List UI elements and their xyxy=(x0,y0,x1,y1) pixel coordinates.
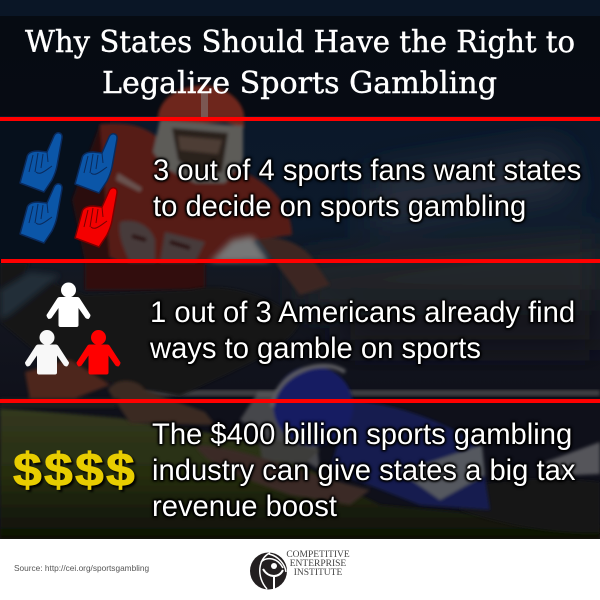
logo wordmark xyxy=(286,550,350,578)
title: Legalize Sports Gambling xyxy=(102,66,497,101)
title: Why States Should Have the Right to xyxy=(25,25,575,60)
sky haze xyxy=(300,145,600,350)
icon: red foam finger xyxy=(75,188,117,247)
logo wordmark: ENTERPRISE xyxy=(290,559,346,569)
icon: blue foam finger xyxy=(20,184,62,243)
icon: red person xyxy=(76,330,120,374)
blue player xyxy=(195,366,490,510)
title xyxy=(24,25,575,101)
statement 1 xyxy=(150,155,583,225)
logo mark xyxy=(250,552,287,590)
divider line xyxy=(1,259,600,263)
title band xyxy=(0,16,600,116)
statement 2: 1 out of 3 Americans already find xyxy=(150,297,575,329)
logo wordmark: COMPETITIVE xyxy=(286,550,350,560)
statement 2 xyxy=(148,297,576,366)
statement 3: The $400 billion sports gambling xyxy=(152,419,572,451)
statement 3: industry can give states a big tax xyxy=(152,455,575,487)
statement 1: to decide on sports gambling xyxy=(153,191,526,223)
icon: white person xyxy=(25,330,69,374)
red player xyxy=(72,86,330,295)
source note: Source: http://cei.org/sportsgambling xyxy=(14,563,149,573)
icon: blue foam finger xyxy=(75,134,117,193)
icon: dollar signs: $$$$ xyxy=(13,444,135,496)
logo wordmark: INSTITUTE xyxy=(294,568,342,578)
divider line xyxy=(0,117,600,121)
logo: Competitive Enterprise Institute xyxy=(250,550,350,590)
icon group: foam fingers xyxy=(19,132,118,248)
statement 1: 3 out of 4 sports fans want states xyxy=(153,155,581,187)
icon: blue foam finger xyxy=(20,133,62,192)
statement 3: revenue boost xyxy=(152,491,337,523)
divider line xyxy=(0,399,600,403)
icon: white person xyxy=(46,282,90,327)
statement 3 xyxy=(150,419,577,523)
stadium stripe xyxy=(120,390,600,396)
black legs and hands xyxy=(0,263,300,425)
dark legs at right xyxy=(460,479,600,533)
statement 2: ways to gamble on sports xyxy=(150,333,481,365)
grass xyxy=(0,408,600,539)
icon group: people xyxy=(25,282,120,374)
